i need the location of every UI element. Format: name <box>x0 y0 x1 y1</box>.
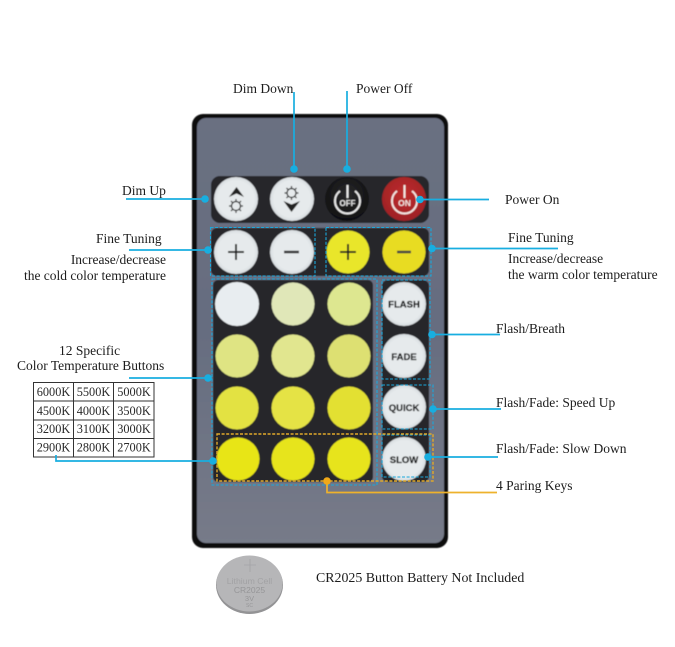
label: flash breath: Flash/Breath <box>496 321 565 336</box>
button: fade: FADE <box>391 352 417 363</box>
label: dim down <box>233 81 298 173</box>
color temperature table: 3000K <box>117 422 151 436</box>
label: fine tuning cold: Fine Tuning <box>96 231 162 246</box>
label: dim down: Dim Down <box>233 81 294 96</box>
button: cold plus <box>214 230 258 274</box>
color temperature table: 4500K <box>37 404 70 418</box>
button: slow <box>382 437 426 481</box>
label: pairing keys: 4 Paring Keys <box>496 478 572 493</box>
label: power on <box>416 192 560 207</box>
panel: power and dimming buttons <box>211 176 429 223</box>
label: fine tuning warm: the warm color temperature <box>508 267 658 282</box>
label: fine tuning warm: Fine Tuning <box>508 230 574 245</box>
icon: CR2025 battery: CR2025 <box>234 585 265 595</box>
label: fine tuning warm <box>428 230 658 282</box>
remote body <box>192 114 448 548</box>
label: speed up <box>429 395 615 413</box>
label: color temperature buttons <box>17 343 212 382</box>
icon: CR2025 battery <box>216 556 283 614</box>
button: slow: SLOW <box>390 455 418 466</box>
button: power on <box>382 177 426 221</box>
icon: CR2025 battery: SC <box>246 603 253 609</box>
dashed group outlines <box>210 228 433 485</box>
color temperature table: 2700K <box>117 440 151 454</box>
button: quick <box>382 385 426 429</box>
color temperature table: 3100K <box>77 422 110 436</box>
label: slow down <box>424 441 627 461</box>
panel: fine tuning buttons <box>211 228 429 276</box>
label: power off: Power Off <box>356 81 413 96</box>
color temperature table: 3500K <box>117 404 151 418</box>
button: dim down <box>270 177 314 221</box>
label: power on: Power On <box>505 192 560 207</box>
icon: CR2025 battery: Lithium Cell <box>227 576 272 586</box>
button: cold minus <box>270 230 314 274</box>
color temperature table: 5000K <box>117 385 151 399</box>
color temperature table: 5500K <box>77 385 110 399</box>
color temperature table: 2800K <box>77 440 110 454</box>
color temperature table: 3200K <box>37 422 70 436</box>
label: pairing keys <box>323 477 572 493</box>
label: fine tuning warm: Increase/decrease <box>508 251 603 266</box>
panel: color temperature buttons <box>213 280 373 482</box>
remote control <box>192 114 448 548</box>
label: dim up <box>122 183 209 203</box>
label: dim up: Dim Up <box>122 183 166 198</box>
label: power off <box>343 81 413 173</box>
color temperature table <box>34 382 154 457</box>
label: speed up: Flash/Fade: Speed Up <box>496 395 615 410</box>
button: dim up <box>214 177 258 221</box>
button: power off <box>325 177 369 221</box>
button: flash <box>382 282 426 326</box>
button: fade <box>382 334 426 378</box>
label: fine tuning cold: the cold color temperature <box>24 268 166 283</box>
label: flash breath <box>428 321 565 338</box>
label: fine tuning cold: Increase/decrease <box>71 252 166 267</box>
color temperature table: 6000K <box>37 385 70 399</box>
button: warm plus <box>326 230 370 274</box>
icon: CR2025 battery: 3V <box>245 594 254 603</box>
button: quick: QUICK <box>389 403 419 414</box>
color temperature table: 4000K <box>77 404 110 418</box>
button: warm minus <box>382 230 426 274</box>
label: color temperature buttons: Color Temperature Buttons <box>17 358 164 373</box>
connector: table to warm buttons <box>56 455 217 465</box>
label: color temperature buttons: 12 Specific <box>59 343 120 358</box>
button: power off: OFF <box>340 199 356 208</box>
label: slow down: Flash/Fade: Slow Down <box>496 441 627 456</box>
color temperature table: 2900K <box>37 440 70 454</box>
battery note: CR2025 Button Battery Not Included <box>316 571 524 586</box>
button: flash: FLASH <box>388 300 420 310</box>
panel: flash and speed buttons <box>382 280 429 482</box>
button: power on: ON <box>398 198 411 208</box>
label: fine tuning cold <box>24 231 212 283</box>
